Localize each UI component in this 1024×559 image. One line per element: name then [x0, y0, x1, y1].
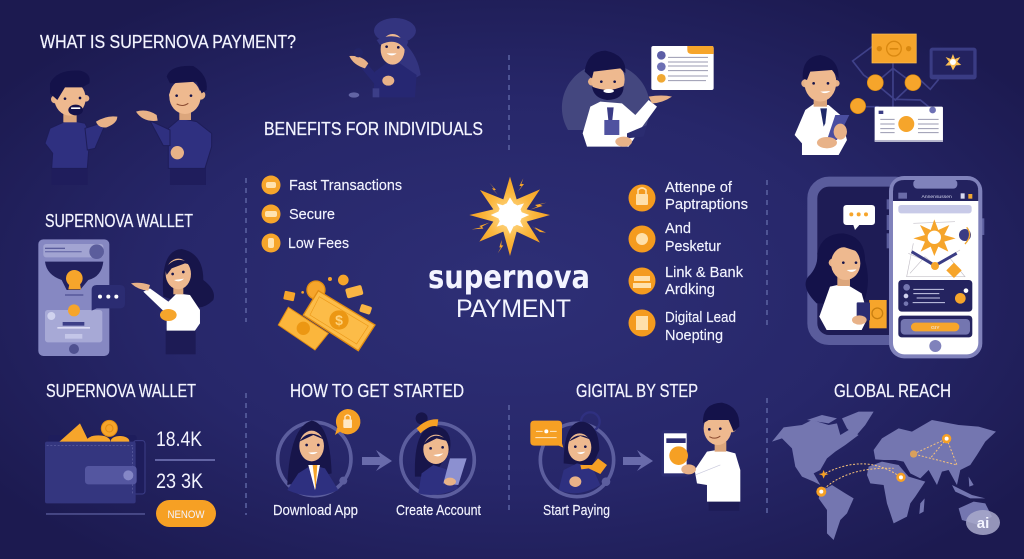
- benefit: fast transactions: Fast Transactions: [289, 177, 402, 194]
- arrow: [623, 450, 653, 471]
- benefit: low fees: Low Fees: [288, 235, 349, 252]
- feature 3: Link & Bank: [665, 264, 743, 281]
- stat: first value: 18.4K: [156, 428, 202, 451]
- feature 1: Attenpe of: [665, 179, 733, 196]
- illustration: money bills and coins: [278, 275, 375, 351]
- illustration: payment phone mockup: Annensussen: [922, 194, 952, 200]
- icon: orange message bubble: [530, 421, 563, 448]
- benefit: secure: Secure: [289, 206, 335, 223]
- feature 1: Paptraptions: [665, 196, 748, 213]
- benefit: low fees: [262, 234, 349, 252]
- network of payment icons: [850, 34, 977, 142]
- info card: [651, 46, 714, 90]
- benefit: secure: [262, 204, 335, 224]
- button: now: NENOW: [168, 509, 205, 521]
- heading: supernova wallet: SUPERNOVA WALLET: [45, 211, 193, 231]
- heading: global reach: GLOBAL REACH: [834, 381, 951, 401]
- logo: supernova wordmark: supernova: [428, 258, 590, 296]
- logo: supernova starburst: [469, 177, 550, 256]
- illustration: man with tablet: [795, 55, 849, 155]
- benefits list: [262, 176, 402, 252]
- heading: supernova wallet lower: SUPERNOVA WALLET: [46, 381, 196, 401]
- feature 2: Pesketur: [665, 238, 721, 255]
- illustration: woman gesturing: [349, 18, 421, 98]
- feature 2: And: [665, 220, 691, 237]
- illustration: bearded man in white coat: [562, 51, 672, 147]
- heading: benefits for individuals: BENEFITS FOR INDIVIDUALS: [264, 119, 483, 139]
- label: Download App: [273, 502, 358, 519]
- illustration: man talking: [136, 66, 212, 185]
- feature 3: [628, 264, 743, 298]
- feature 4: Digital Lead: [665, 309, 736, 326]
- label: Start Paying: [543, 502, 610, 519]
- illustration: wallet app phone: [38, 239, 125, 356]
- heading: gigital by step: GIGITAL BY STEP: [576, 381, 698, 401]
- label: Create Account: [396, 502, 482, 519]
- watermark: ai badge: ai: [977, 515, 989, 532]
- icon: lock bubble: [335, 409, 360, 435]
- feature 2: [628, 220, 721, 255]
- logo: payment wordmark: PAYMENT: [456, 295, 571, 323]
- illustration: tablet frame with woman: [806, 182, 912, 340]
- illustration: bearded man talking: [45, 71, 117, 185]
- illustration: man holding tablet: [661, 403, 740, 511]
- step: download app: [273, 409, 360, 519]
- feature 4: Noepting: [665, 327, 723, 344]
- benefit: fast transactions: [262, 176, 402, 194]
- icon: woman in ring with bubble: [540, 412, 614, 497]
- icon: woman with tablet in ring: [401, 412, 474, 497]
- arrow: [362, 450, 392, 471]
- feature 1: [628, 179, 748, 213]
- illustration: money bills and coins: $: [335, 312, 343, 328]
- feature 3: Ardking: [665, 281, 715, 298]
- heading: what is supernova payment: WHAT IS SUPERNOVA PAYMENT?: [40, 32, 296, 52]
- step: create account: [396, 412, 482, 519]
- illustration: wallet with coins: [45, 420, 145, 515]
- button: now: [156, 500, 216, 527]
- features list: [628, 179, 748, 344]
- step: start paying: [530, 412, 614, 519]
- watermark: ai badge: [966, 510, 1000, 535]
- illustration: payment phone mockup: [887, 176, 984, 358]
- feature 4: [628, 309, 736, 344]
- heading: how to get started: HOW TO GET STARTED: [290, 381, 464, 401]
- illustration: payment phone mockup: GIY: [931, 325, 940, 331]
- icon: woman in ring: [278, 421, 351, 496]
- world map with routes: [772, 412, 996, 540]
- stat: second value: 23 3K: [156, 470, 203, 493]
- illustration: woman with wallet phone: [131, 249, 214, 354]
